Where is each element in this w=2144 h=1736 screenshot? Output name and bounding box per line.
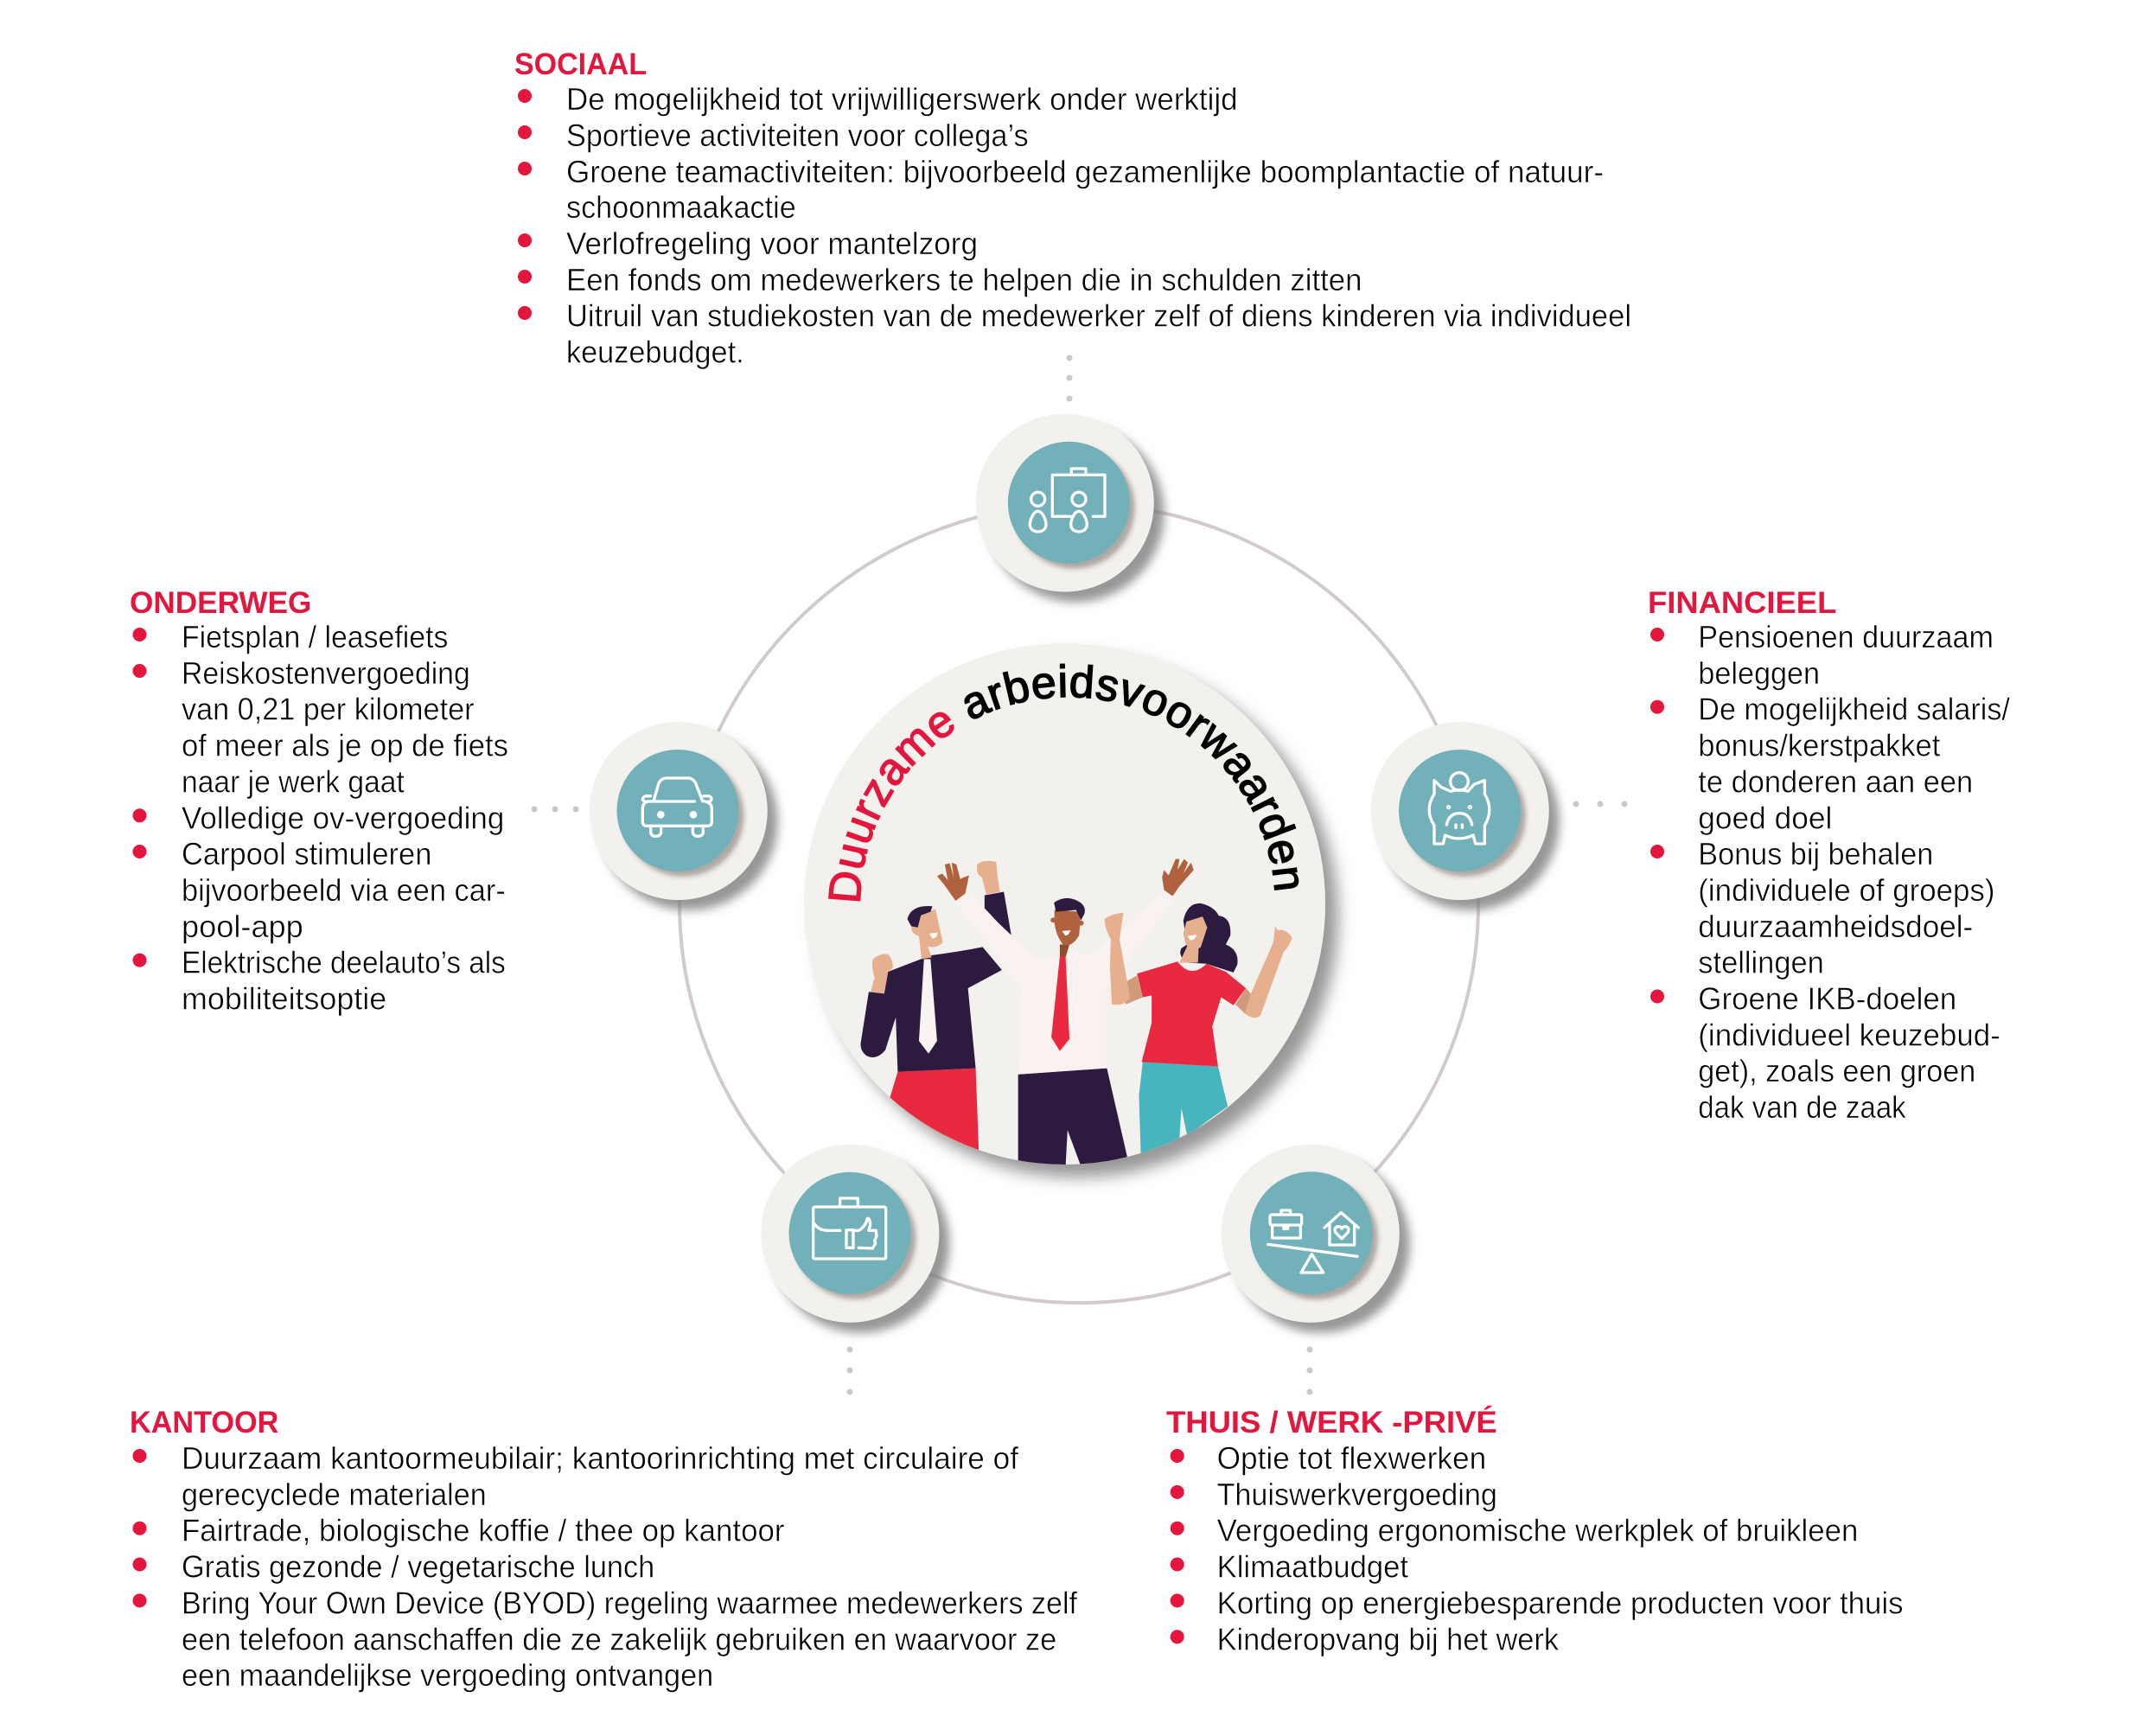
woman shirt — [1137, 961, 1246, 1066]
panel: kantoor — [130, 1406, 1078, 1693]
icon: people with briefcase — [1030, 469, 1105, 532]
list: financieel: (individuele of groeps) — [1698, 872, 1995, 908]
icon badge: financieel — [1371, 722, 1549, 900]
icon: piggy bank — [1429, 773, 1490, 844]
centre man head — [1060, 944, 1069, 957]
curved title: Duurzame arbeidsvoorwaarden — [828, 664, 1299, 901]
icon badge: kantoor — [761, 1145, 939, 1323]
left man neck and head — [911, 909, 943, 959]
connecting ring — [680, 504, 1478, 1303]
list: sociaal: De mogelijkheid tot vrijwilligerswerk onder werktijd — [566, 81, 1238, 117]
list: kantoor: Fairtrade, biologische koffie / thee op kantoor — [182, 1513, 785, 1548]
illustration: three cheering people — [860, 859, 1292, 1166]
list: kantoor: Duurzaam kantoormeubilair; kantoorinrichting met circulaire of — [182, 1440, 1019, 1476]
list: sociaal: Verlofregeling voor mantelzorg — [566, 226, 978, 261]
left man jacket — [860, 947, 1002, 1072]
list: financieel: get), zoals een groen — [1698, 1053, 1975, 1088]
list: sociaal: Uitruil van studiekosten van de medewerker zelf of diens kinderen via individueel — [566, 297, 1631, 334]
panel: financieel — [1648, 586, 2011, 1125]
list: kantoor: Bring Your Own Device (BYOD) regeling waarmee medewerkers zelf — [182, 1585, 1078, 1620]
list: thuis / werk-prive: Optie tot flexwerken — [1217, 1440, 1486, 1476]
panel: sociaal — [514, 48, 1631, 370]
list: financieel: beleggen — [1698, 655, 1820, 691]
woman pants — [1139, 1062, 1228, 1156]
list: sociaal: keuzebudget. — [566, 334, 744, 370]
heading: thuis / werk-prive: THUIS / WERK -PRIVÉ — [1166, 1405, 1497, 1439]
list: onderweg: of meer als je op de fiets — [182, 728, 508, 763]
list: financieel: goed doel — [1698, 800, 1832, 835]
list: onderweg: naar je werk gaat — [182, 763, 405, 799]
left man pants — [890, 1069, 979, 1150]
list: financieel — [1698, 619, 2011, 1125]
panel: thuis / werk-prive — [1166, 1405, 1904, 1656]
bullets: kantoor — [133, 1449, 147, 1607]
centre man tie — [1051, 956, 1069, 1051]
list: thuis / werk-prive: Thuiswerkvergoeding — [1217, 1477, 1497, 1512]
list: onderweg: Reiskostenvergoeding — [182, 655, 470, 691]
icon badge: sociaal — [976, 413, 1154, 591]
list: onderweg: mobiliteitsoptie — [182, 980, 386, 1017]
dotted connector: onderweg — [531, 806, 579, 813]
icon: balance of work and home — [1268, 1210, 1358, 1273]
list: kantoor — [182, 1440, 1078, 1693]
heading: financieel: FINANCIEEL — [1648, 586, 1836, 620]
list: financieel: stellingen — [1698, 945, 1824, 980]
list: financieel: (individueel keuzebud- — [1698, 1017, 2000, 1052]
list: sociaal: schoonmaakactie — [566, 189, 796, 225]
list: thuis / werk-prive: Korting op energiebesparende producten voor thuis — [1217, 1585, 1904, 1620]
list: financieel: dak van de zaak — [1698, 1089, 1906, 1125]
list: thuis / werk-prive: Klimaatbudget — [1217, 1549, 1408, 1584]
list: financieel: Groene IKB-doelen — [1698, 980, 1956, 1017]
list: kantoor: een maandelijkse vergoeding ontvangen — [182, 1657, 713, 1693]
heading: sociaal: SOCIAAL — [514, 48, 647, 81]
list: onderweg: Fietsplan / leasefiets — [182, 619, 448, 654]
list: sociaal: Groene teamactiviteiten: bijvoorbeeld gezamenlijke boomplantactie of natuur- — [566, 154, 1604, 189]
list: onderweg: van 0,21 per kilometer — [182, 692, 474, 727]
icon: car — [642, 778, 711, 836]
left man tie — [919, 959, 937, 1054]
heading: onderweg: ONDERWEG — [130, 586, 311, 620]
dotted connector: sociaal — [1067, 354, 1072, 401]
centre man hands — [937, 863, 969, 901]
list: financieel: Bonus bij behalen — [1698, 836, 1933, 871]
icon badge: onderweg — [590, 722, 768, 900]
list: onderweg: Elektrische deelauto’s als — [182, 945, 506, 980]
bullets: financieel — [1650, 628, 1664, 1003]
left man fist — [871, 954, 893, 993]
list: onderweg: pool-app — [182, 909, 303, 944]
panel: onderweg — [130, 586, 508, 1017]
woman arms — [1126, 975, 1251, 1013]
icon badge: thuis / werk-prive — [1222, 1145, 1400, 1323]
centre man shirt — [996, 922, 1107, 1075]
woman neck and face — [1179, 944, 1199, 963]
bullets: onderweg — [133, 628, 147, 967]
list: onderweg — [182, 619, 508, 1017]
woman hair — [1180, 903, 1238, 973]
list: thuis / werk-prive: Kinderopvang bij het werk — [1217, 1621, 1560, 1656]
list: thuis / werk-prive: Vergoeding ergonomische werkplek of bruikleen — [1217, 1513, 1858, 1548]
list: sociaal: Sportieve activiteiten voor collega’s — [566, 118, 1029, 153]
icon: briefcase with thumb up — [814, 1198, 886, 1259]
list: financieel: duurzaamheidsdoel- — [1698, 909, 1973, 944]
list: financieel: De mogelijkheid salaris/ — [1698, 692, 2011, 727]
list: kantoor: een telefoon aanschaffen die ze zakelijk gebruiken en waarvoor ze — [182, 1621, 1056, 1656]
list: onderweg: bijvoorbeeld via een car- — [182, 872, 506, 908]
dotted connector: thuis — [1307, 1347, 1312, 1395]
list: kantoor: Gratis gezonde / vegetarische lunch — [182, 1549, 654, 1584]
list: kantoor: gerecyclede materialen — [182, 1477, 487, 1512]
list: onderweg: Volledige ov-vergoeding — [182, 800, 504, 835]
central disc — [804, 643, 1349, 1188]
list: sociaal: Een fonds om medewerkers te helpen die in schulden zitten — [566, 262, 1362, 297]
bullets: thuis / werk-prive — [1171, 1449, 1184, 1643]
list: financieel: te donderen aan een — [1698, 763, 1973, 799]
bullets: sociaal — [518, 89, 532, 320]
list: sociaal — [566, 81, 1631, 370]
left man raised sleeve — [985, 891, 1011, 937]
list: onderweg: Carpool stimuleren — [182, 836, 431, 871]
heading: kantoor: KANTOOR — [130, 1406, 278, 1439]
list: thuis / werk-prive — [1217, 1440, 1904, 1656]
list: financieel: Pensioenen duurzaam — [1698, 619, 1994, 654]
dotted connector: kantoor — [847, 1347, 852, 1395]
centre man pants — [1018, 1069, 1127, 1166]
list: financieel: bonus/kerstpakket — [1698, 728, 1940, 763]
dotted connector: financieel — [1573, 801, 1627, 807]
